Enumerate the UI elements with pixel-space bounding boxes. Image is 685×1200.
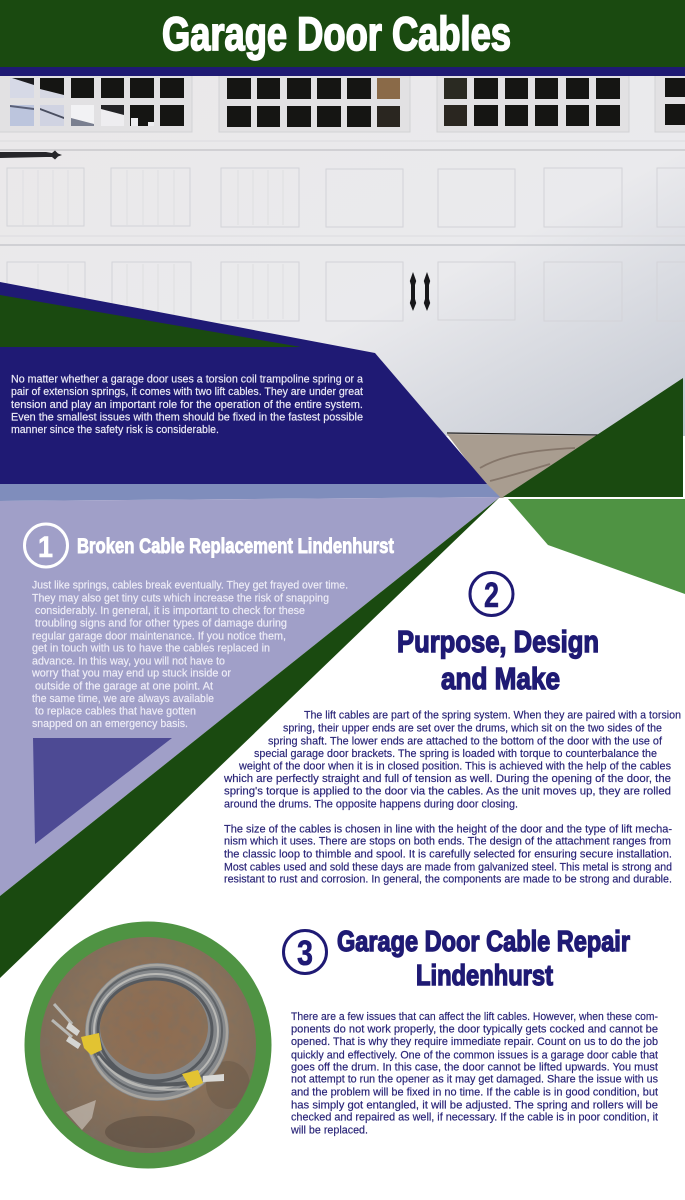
dark green diagonal band <box>0 497 500 978</box>
text: section 1 <box>31 580 348 730</box>
text: section 2: special garage door brackets. The spring is loaded with torque to counterbalance the <box>254 748 657 760</box>
heading: section 3: Lindenhurst <box>416 960 553 992</box>
header navy stripe <box>0 67 685 76</box>
title: Garage Door Cables <box>162 7 511 60</box>
intro text: pair of extension springs, it comes with two lift cables. They are under great <box>11 386 364 398</box>
icon: number 2: 2 <box>484 576 499 615</box>
text: section 3: opened. That is why they require immediate repair. Count on us to do the job <box>291 1036 658 1048</box>
intro text: Even the smallest issues with them should be fixed in the fastest possible <box>11 412 363 424</box>
text: section 3: checked and repaired as well, if necessary. If the cable is in poor condition, it <box>291 1112 659 1124</box>
text: section 2: the classic loop to thimble and spool. It is carefully selected for ensuring secure installation. <box>224 849 672 861</box>
panel: mid green right shape <box>508 499 685 594</box>
text: section 3: ponents do not work properly, the door typically gets cocked and cannot be <box>291 1024 658 1036</box>
heading: section 2: and Make <box>441 661 560 696</box>
text: section 1: They may also get tiny cuts which increase the risk of snapping <box>32 593 329 605</box>
green ring <box>24 922 272 1168</box>
text: section 3: goes off the drum. In this case, the door cannot be lifted upwards. You must <box>291 1062 659 1074</box>
text: section 3: There are a few issues that can affect the lift cables. However, when these com- <box>291 1011 658 1023</box>
text: section 2 <box>223 710 681 886</box>
reflections in first window <box>12 78 34 85</box>
cable coil photo in green ring <box>24 922 272 1168</box>
garage door photo <box>0 74 685 436</box>
icon: number 3: 3 <box>297 934 313 973</box>
text: section 1: regular garage door maintenance. If you notice them, <box>32 630 286 642</box>
icon: number 2 <box>470 572 513 616</box>
intro text: tension and play an important role for the operation of the entire system. <box>11 399 363 411</box>
concrete driveway <box>447 434 600 498</box>
intro text: No matter whether a garage door uses a torsion coil trampoline spring or a <box>11 374 364 386</box>
text: section 3: quickly and effectively. One of the common issues is a garage door cable that <box>291 1049 659 1061</box>
cable coil <box>85 963 229 1101</box>
intro text <box>11 374 364 436</box>
text: section 1: Just like springs, cables break eventually. They get frayed over time. <box>32 580 348 592</box>
heading: section 2 <box>397 624 599 696</box>
panel: intro navy <box>0 282 487 484</box>
text: section 2: nism which it uses. There are stops on both ends. The design of the attachment ranges from <box>224 836 671 848</box>
text: section 3: has simply got entangled, it will be adjusted. The spring and rollers will be <box>291 1099 658 1111</box>
text: section 1: considerably. In general, it is important to check for these <box>35 605 305 617</box>
text: section 2: around the drums. The opposite happens during door closing. <box>224 798 518 810</box>
photo <box>40 937 256 1153</box>
door panel seams <box>0 141 685 245</box>
panel: dark green right triangle <box>503 378 683 497</box>
window frames <box>0 74 685 132</box>
text: section 2: spring, their upper ends are set over the drums, which sit on the two sides of the <box>283 722 662 734</box>
text: section 1: to replace cables that have gotten <box>35 705 196 717</box>
green wedge <box>0 295 301 347</box>
text: section 2: spring shaft. The lower ends are attached to the bottom of the door with the use of <box>268 735 663 747</box>
heading: section 2: Purpose, Design <box>397 624 599 659</box>
text: section 2: spring's torque is applied to the door via the cables. As the unit moves up, they are rolled <box>224 786 671 798</box>
text: section 3 <box>290 1011 659 1136</box>
icon: number 1: 1 <box>38 531 53 564</box>
cable ends <box>52 1004 72 1037</box>
text: section 1: troubling signs and for other types of damage during <box>35 618 287 630</box>
header band <box>0 0 685 67</box>
heading: section 1: Broken Cable Replacement Lindenhurst <box>77 535 394 558</box>
icon: number 1 <box>24 524 68 567</box>
light blue band <box>0 484 500 501</box>
panel: section 1 purple <box>0 497 500 896</box>
text: section 1: advance. In this way, you will not have to <box>32 655 225 667</box>
intro text: manner since the safety risk is considerable. <box>11 424 219 436</box>
text: section 3: and the problem will be fixed in no time. If the cable is in good condition, but <box>291 1087 659 1099</box>
purple triangle accent <box>33 738 172 844</box>
heading: section 3 <box>337 926 630 992</box>
text: section 3: not attempt to run the opener as it may get damaged. Share the issue with us <box>291 1074 658 1086</box>
text: section 1: get in touch with us to have the cables replaced in <box>32 643 270 655</box>
text: section 2: which are perfectly straight and full of tension as well. During the opening of the door, the <box>223 773 671 785</box>
text: section 1: snapped on an emergency basis. <box>32 718 188 730</box>
icon: number 3 <box>284 930 326 974</box>
yellow tape <box>81 1033 102 1055</box>
text: section 3: will be replaced. <box>290 1124 368 1136</box>
text: section 2: The size of the cables is chosen in line with the height of the door and the type of lift mecha- <box>224 824 672 836</box>
icon: door handles <box>410 272 430 311</box>
door bottom line <box>447 433 600 435</box>
text: section 2: weight of the door when it is in closed position. This is achieved with the help of the cables <box>238 760 671 772</box>
window panes <box>10 78 685 127</box>
icon: door hinge strap <box>0 150 62 160</box>
text: section 1: outside of the garage at one point. At <box>35 680 214 692</box>
text: section 1: worry that you may end up stuck inside or <box>31 668 231 680</box>
text: section 1: the same time, we are always available <box>32 693 214 705</box>
